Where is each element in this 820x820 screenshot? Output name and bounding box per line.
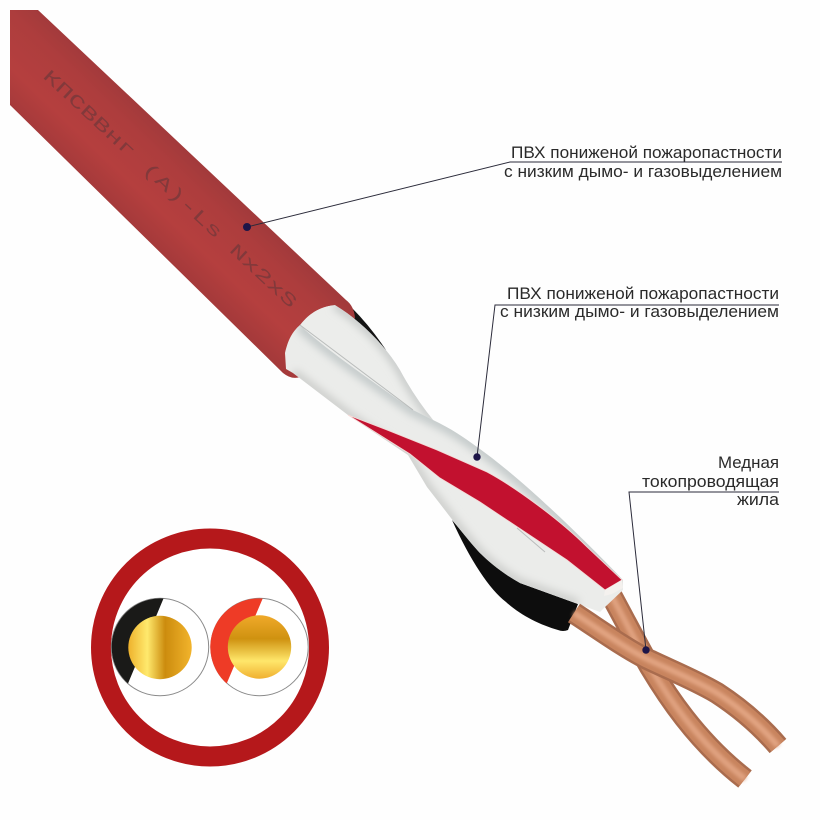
- front white core: [285, 325, 623, 612]
- left conductor: [111, 598, 209, 696]
- callout: outer sheath: [243, 143, 782, 231]
- back white core: [300, 305, 434, 421]
- black conductor sliver: [335, 304, 386, 350]
- red stripe: [348, 415, 622, 590]
- leader line: [477, 305, 779, 457]
- label text: ПВХ пониженой пожаропастности: [511, 143, 782, 162]
- right conductor: [210, 598, 308, 696]
- label text: [504, 143, 782, 181]
- callout: insulation: [473, 284, 779, 461]
- label text: ПВХ пониженой пожаропастности: [507, 284, 779, 303]
- label text: с низким дымо- и газовыделением: [500, 302, 779, 321]
- marker dot: [243, 223, 251, 231]
- jacket marking: КПСВВнг (А)-Ls Nх2хS: [38, 67, 300, 313]
- core edge shading: [300, 325, 623, 580]
- label text: токопроводящая: [642, 472, 779, 491]
- core seam: [300, 325, 545, 552]
- label text: [642, 453, 780, 509]
- outer red jacket: [10, 10, 355, 378]
- callout: copper conductor: [629, 453, 780, 654]
- black insulated core: [452, 520, 578, 631]
- label text: [500, 284, 779, 321]
- leader line: [247, 162, 782, 227]
- marker dot: [642, 646, 650, 654]
- cross-section diagram: [101, 538, 319, 756]
- marker dot: [473, 453, 481, 461]
- leader line: [629, 492, 779, 650]
- white end cap: [604, 580, 623, 596]
- label text: жила: [737, 490, 780, 509]
- copper wire: lower strand: [610, 593, 745, 779]
- label text: Медная: [718, 453, 779, 472]
- outer sheath ring: [101, 538, 319, 756]
- label text: с низким дымо- и газовыделением: [504, 162, 782, 181]
- copper wire: upper strand: [574, 613, 778, 746]
